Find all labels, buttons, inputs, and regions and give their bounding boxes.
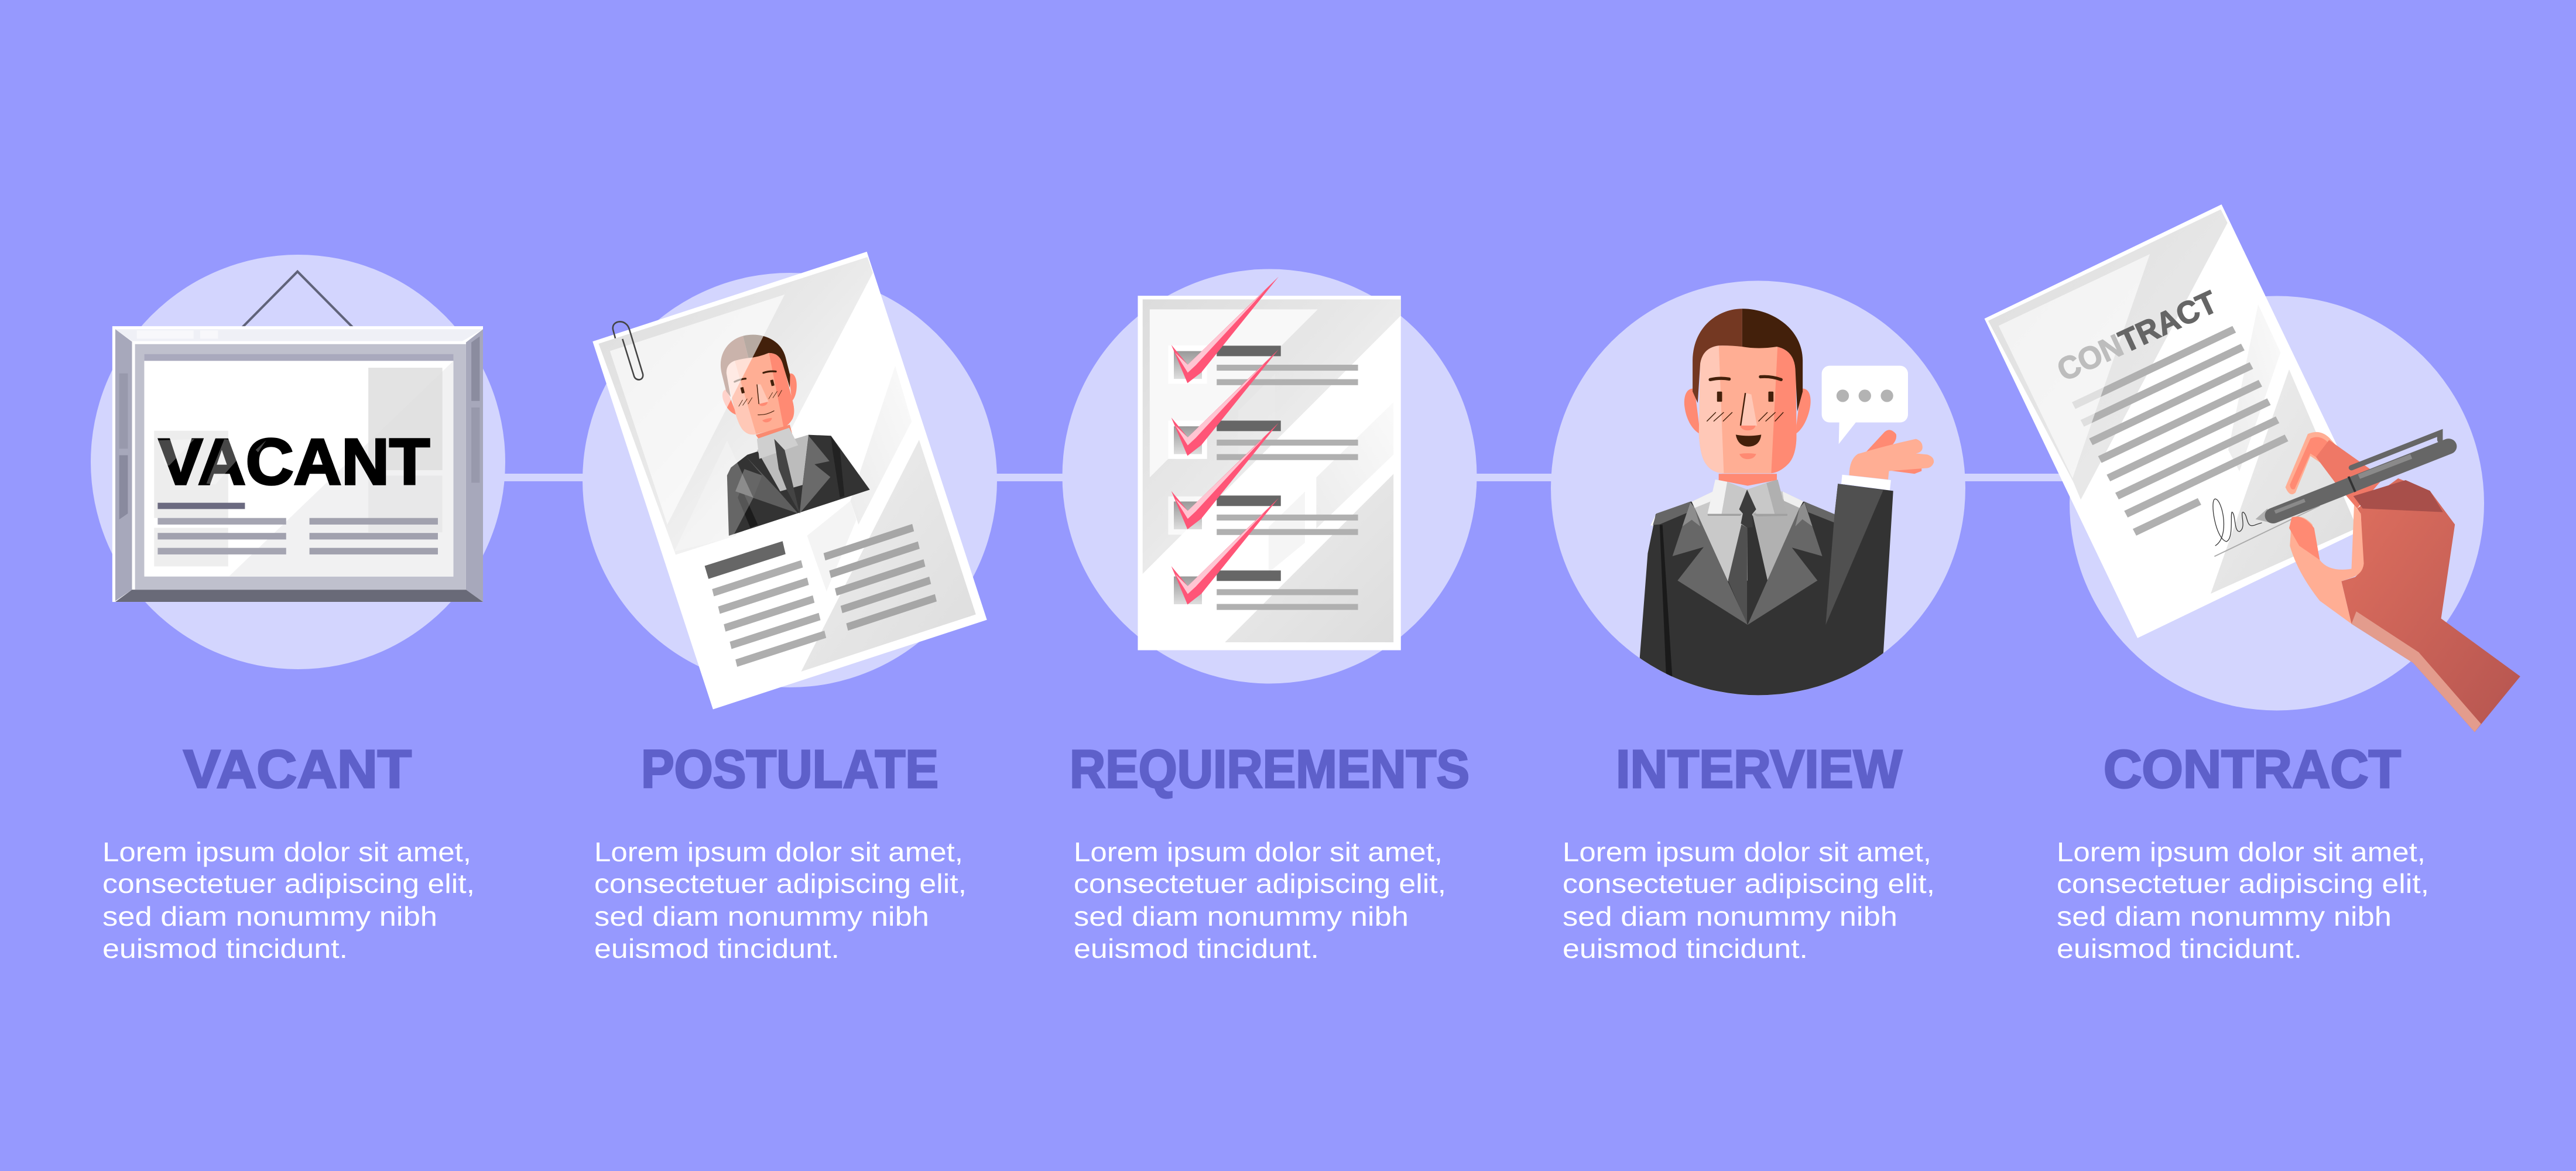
checklist text bars [1217, 345, 1358, 610]
panel: vacant [91, 255, 505, 964]
text: vacant: euismod tincidunt. [102, 933, 348, 964]
circle: interview [1551, 281, 1965, 696]
paperclip [613, 321, 643, 379]
heading: postulate: POSTULATE [641, 739, 938, 799]
resume portrait head [710, 326, 807, 440]
text: vacant: consectetuer adipiscing elit, [102, 868, 475, 899]
icon: resume sheet [592, 252, 987, 710]
cuff [1841, 475, 1891, 490]
sign frame [112, 326, 483, 602]
circle: contract [2070, 296, 2484, 711]
text: contract: euismod tincidunt. [2057, 933, 2302, 964]
icon: vacant sign [112, 272, 483, 602]
person body [1636, 474, 1893, 701]
text: interview: consectetuer adipiscing elit, [1563, 868, 1935, 899]
checklist paper [1138, 296, 1401, 650]
sign paper [144, 354, 453, 577]
text: requirements: euismod tincidunt. [1074, 933, 1319, 964]
text: vacant: Lorem ipsum dolor sit amet, [102, 837, 471, 867]
sign word: VACANT [159, 425, 430, 498]
raised hand [1849, 430, 1934, 480]
text: contract: sed diam nonummy nibh [2057, 901, 2392, 932]
signature [2213, 499, 2262, 546]
text: postulate: euismod tincidunt. [594, 933, 840, 964]
contract details [1999, 254, 2320, 556]
icon: interview person [1636, 309, 1934, 701]
sign text bars [157, 503, 438, 554]
circle: postulate [583, 273, 997, 687]
text: contract [2057, 837, 2429, 964]
text: interview: sed diam nonummy nibh [1563, 901, 1897, 932]
text: requirements: sed diam nonummy nibh [1074, 901, 1409, 932]
text: requirements: Lorem ipsum dolor sit amet, [1074, 837, 1443, 867]
panel: contract [1985, 204, 2520, 964]
circle: vacant [91, 255, 505, 669]
heading: contract: CONTRACT [2104, 739, 2401, 799]
red check marks [1171, 277, 1279, 604]
icon: checklist [1138, 277, 1401, 650]
resume portrait torso [727, 424, 870, 536]
contract word: CONTRACT [2052, 285, 2222, 388]
sign gloss [159, 439, 266, 485]
connector line [298, 474, 2277, 481]
text: contract: consectetuer adipiscing elit, [2057, 868, 2429, 899]
text: interview [1563, 837, 1935, 964]
text: vacant [102, 837, 475, 964]
panel: postulate [583, 252, 997, 964]
text: postulate: consectetuer adipiscing elit, [594, 868, 967, 899]
text: postulate: sed diam nonummy nibh [594, 901, 929, 932]
contract paper [1985, 204, 2375, 638]
icon: contract and hand [1985, 204, 2520, 732]
heading: requirements: REQUIREMENTS [1070, 739, 1469, 799]
panel: interview [1551, 281, 1965, 964]
resume paper [592, 252, 987, 710]
sign hanger [242, 272, 353, 327]
text: postulate: Lorem ipsum dolor sit amet, [594, 837, 963, 867]
heading: interview: INTERVIEW [1616, 739, 1902, 799]
heading: vacant: VACANT [183, 739, 412, 799]
text: interview: Lorem ipsum dolor sit amet, [1563, 837, 1931, 867]
checkbox squares [1174, 351, 1202, 604]
hand with pen [2256, 432, 2520, 732]
resume gloss and text bars [610, 295, 937, 667]
text: contract: Lorem ipsum dolor sit amet, [2057, 837, 2426, 867]
checkbox halos [1168, 345, 1207, 535]
speech bubble [1822, 366, 1908, 444]
text: interview: euismod tincidunt. [1563, 933, 1808, 964]
panel: requirements [1062, 269, 1477, 964]
text: vacant: sed diam nonummy nibh [102, 901, 437, 932]
text: postulate [594, 837, 967, 964]
text: requirements: consectetuer adipiscing elit, [1074, 868, 1446, 899]
person head [1684, 309, 1811, 474]
circle: requirements [1062, 269, 1477, 684]
text: requirements [1074, 837, 1446, 964]
